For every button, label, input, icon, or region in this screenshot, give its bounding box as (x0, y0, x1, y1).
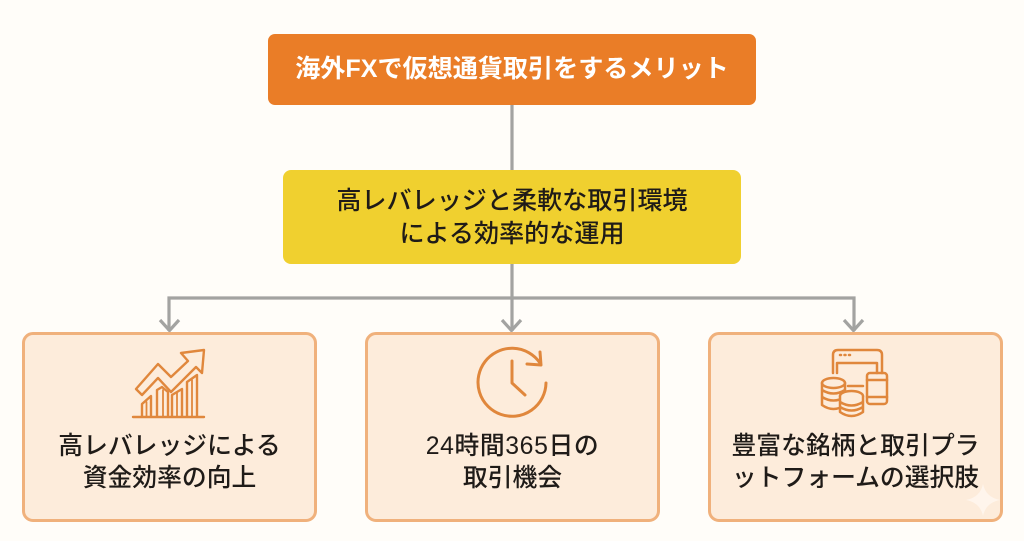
panel: products and platforms (708, 332, 1003, 522)
title: 海外FXで仮想通貨取引をするメリット (295, 55, 729, 83)
summary box: 高レバレッジと柔軟な取引環境 (336, 187, 688, 215)
label (426, 432, 599, 492)
label: 資金効率の向上 (83, 465, 256, 492)
sparkle watermark (967, 485, 999, 515)
title (268, 34, 756, 105)
icon: rising chart (132, 348, 206, 418)
label (58, 432, 281, 492)
icon: clock with arrow (476, 346, 548, 418)
label: 24時間365日の (426, 433, 599, 460)
label: 取引機会 (463, 465, 562, 492)
label (732, 432, 979, 492)
summary box (283, 170, 741, 264)
label: 高レバレッジによる (58, 433, 281, 460)
label: ットフォームの選択肢 (732, 465, 979, 492)
icon: coins, browser and phone (820, 348, 888, 418)
label: 豊富な銘柄と取引プラ (732, 433, 979, 460)
panel: high leverage (22, 332, 317, 522)
panel: 24 hours (365, 332, 660, 522)
summary box: による効率的な運用 (399, 220, 625, 248)
